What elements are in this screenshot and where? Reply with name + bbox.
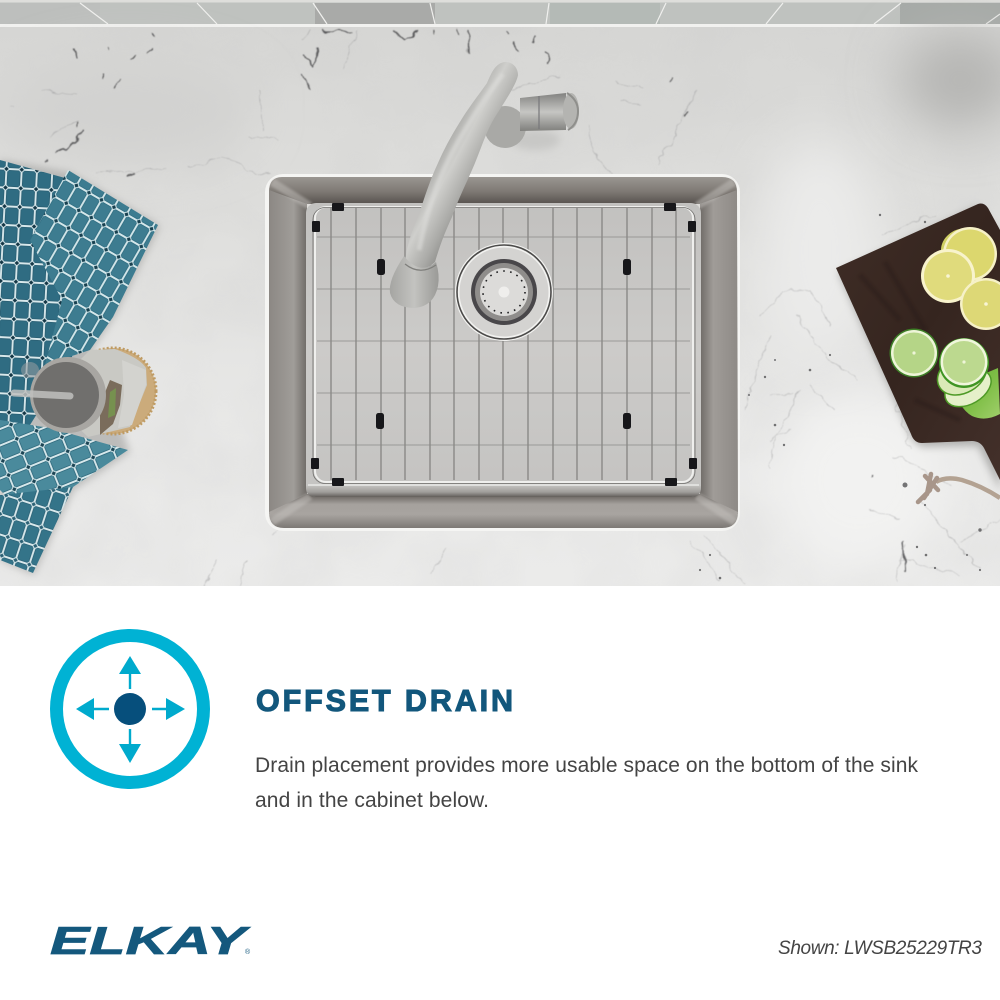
arrow left [76, 698, 109, 720]
towel under jar [0, 296, 74, 425]
towel: patterned teal cloth [0, 160, 160, 575]
body text [255, 754, 918, 812]
faucet base [484, 106, 526, 148]
lime slices and cut lime [890, 328, 1000, 419]
towel upper fold [30, 170, 158, 365]
marble countertop [0, 27, 1000, 586]
spout highlight [419, 74, 503, 250]
glass jar body [81, 349, 147, 437]
faucet shadow [510, 130, 560, 150]
towel lower layer [0, 160, 64, 290]
grid horizontal wires [317, 237, 690, 445]
rope loop [918, 474, 1000, 502]
straw [14, 393, 70, 396]
icon ring [56, 636, 204, 782]
arched spout [405, 62, 518, 269]
cork coaster [96, 346, 158, 436]
basin bottom wall [269, 494, 738, 528]
jar on cork coaster [14, 348, 156, 437]
faucet: arched spout with side handle [390, 62, 579, 308]
jar lid [30, 357, 106, 433]
body text: Drain placement provides more usable space on the bottom of the sink [255, 754, 918, 777]
towel bottom fold [0, 420, 128, 500]
heading: OFFSET DRAIN [256, 684, 513, 718]
wooden board [836, 204, 1000, 480]
wall tile strip [0, 0, 1000, 28]
towel drop shadow [0, 160, 160, 575]
hero photo: kitchen sink from above [0, 0, 1000, 586]
lemon slices [921, 227, 1000, 330]
stainless sink basin [265, 174, 740, 531]
rubber bumpers [311, 203, 697, 486]
icon: offset drain directional arrows [56, 636, 204, 782]
basin corner creases [272, 182, 735, 522]
faucet bell escutcheon [390, 256, 439, 308]
arrow up [119, 656, 141, 689]
basin left wall [269, 190, 307, 514]
wire sink grid [313, 207, 695, 484]
grid vertical wires [331, 208, 676, 480]
body text: and in the cabinet below. [255, 789, 489, 812]
arrow down [119, 729, 141, 763]
lever handle [520, 93, 579, 131]
basin right wall [700, 190, 738, 514]
towel bottom tail [0, 487, 73, 573]
icon drain dot [114, 693, 146, 725]
logo: Elkay: ELKAY [50, 920, 251, 963]
basin floor [306, 203, 701, 497]
sink rim [265, 174, 740, 531]
model caption: Shown: LWSB25229TR3 [778, 938, 982, 959]
logo: Elkay [50, 920, 251, 963]
marble dark veins [44, 30, 906, 571]
marble light veins [10, 30, 1000, 585]
logo: Elkay: ® [245, 948, 251, 956]
marble speckles [699, 214, 982, 579]
cutting board with citrus [836, 204, 1000, 502]
drain strainer [455, 243, 553, 341]
board shadow [838, 206, 1000, 490]
arrow right [152, 698, 185, 720]
grid frame [315, 207, 693, 482]
basin top wall [269, 177, 737, 204]
